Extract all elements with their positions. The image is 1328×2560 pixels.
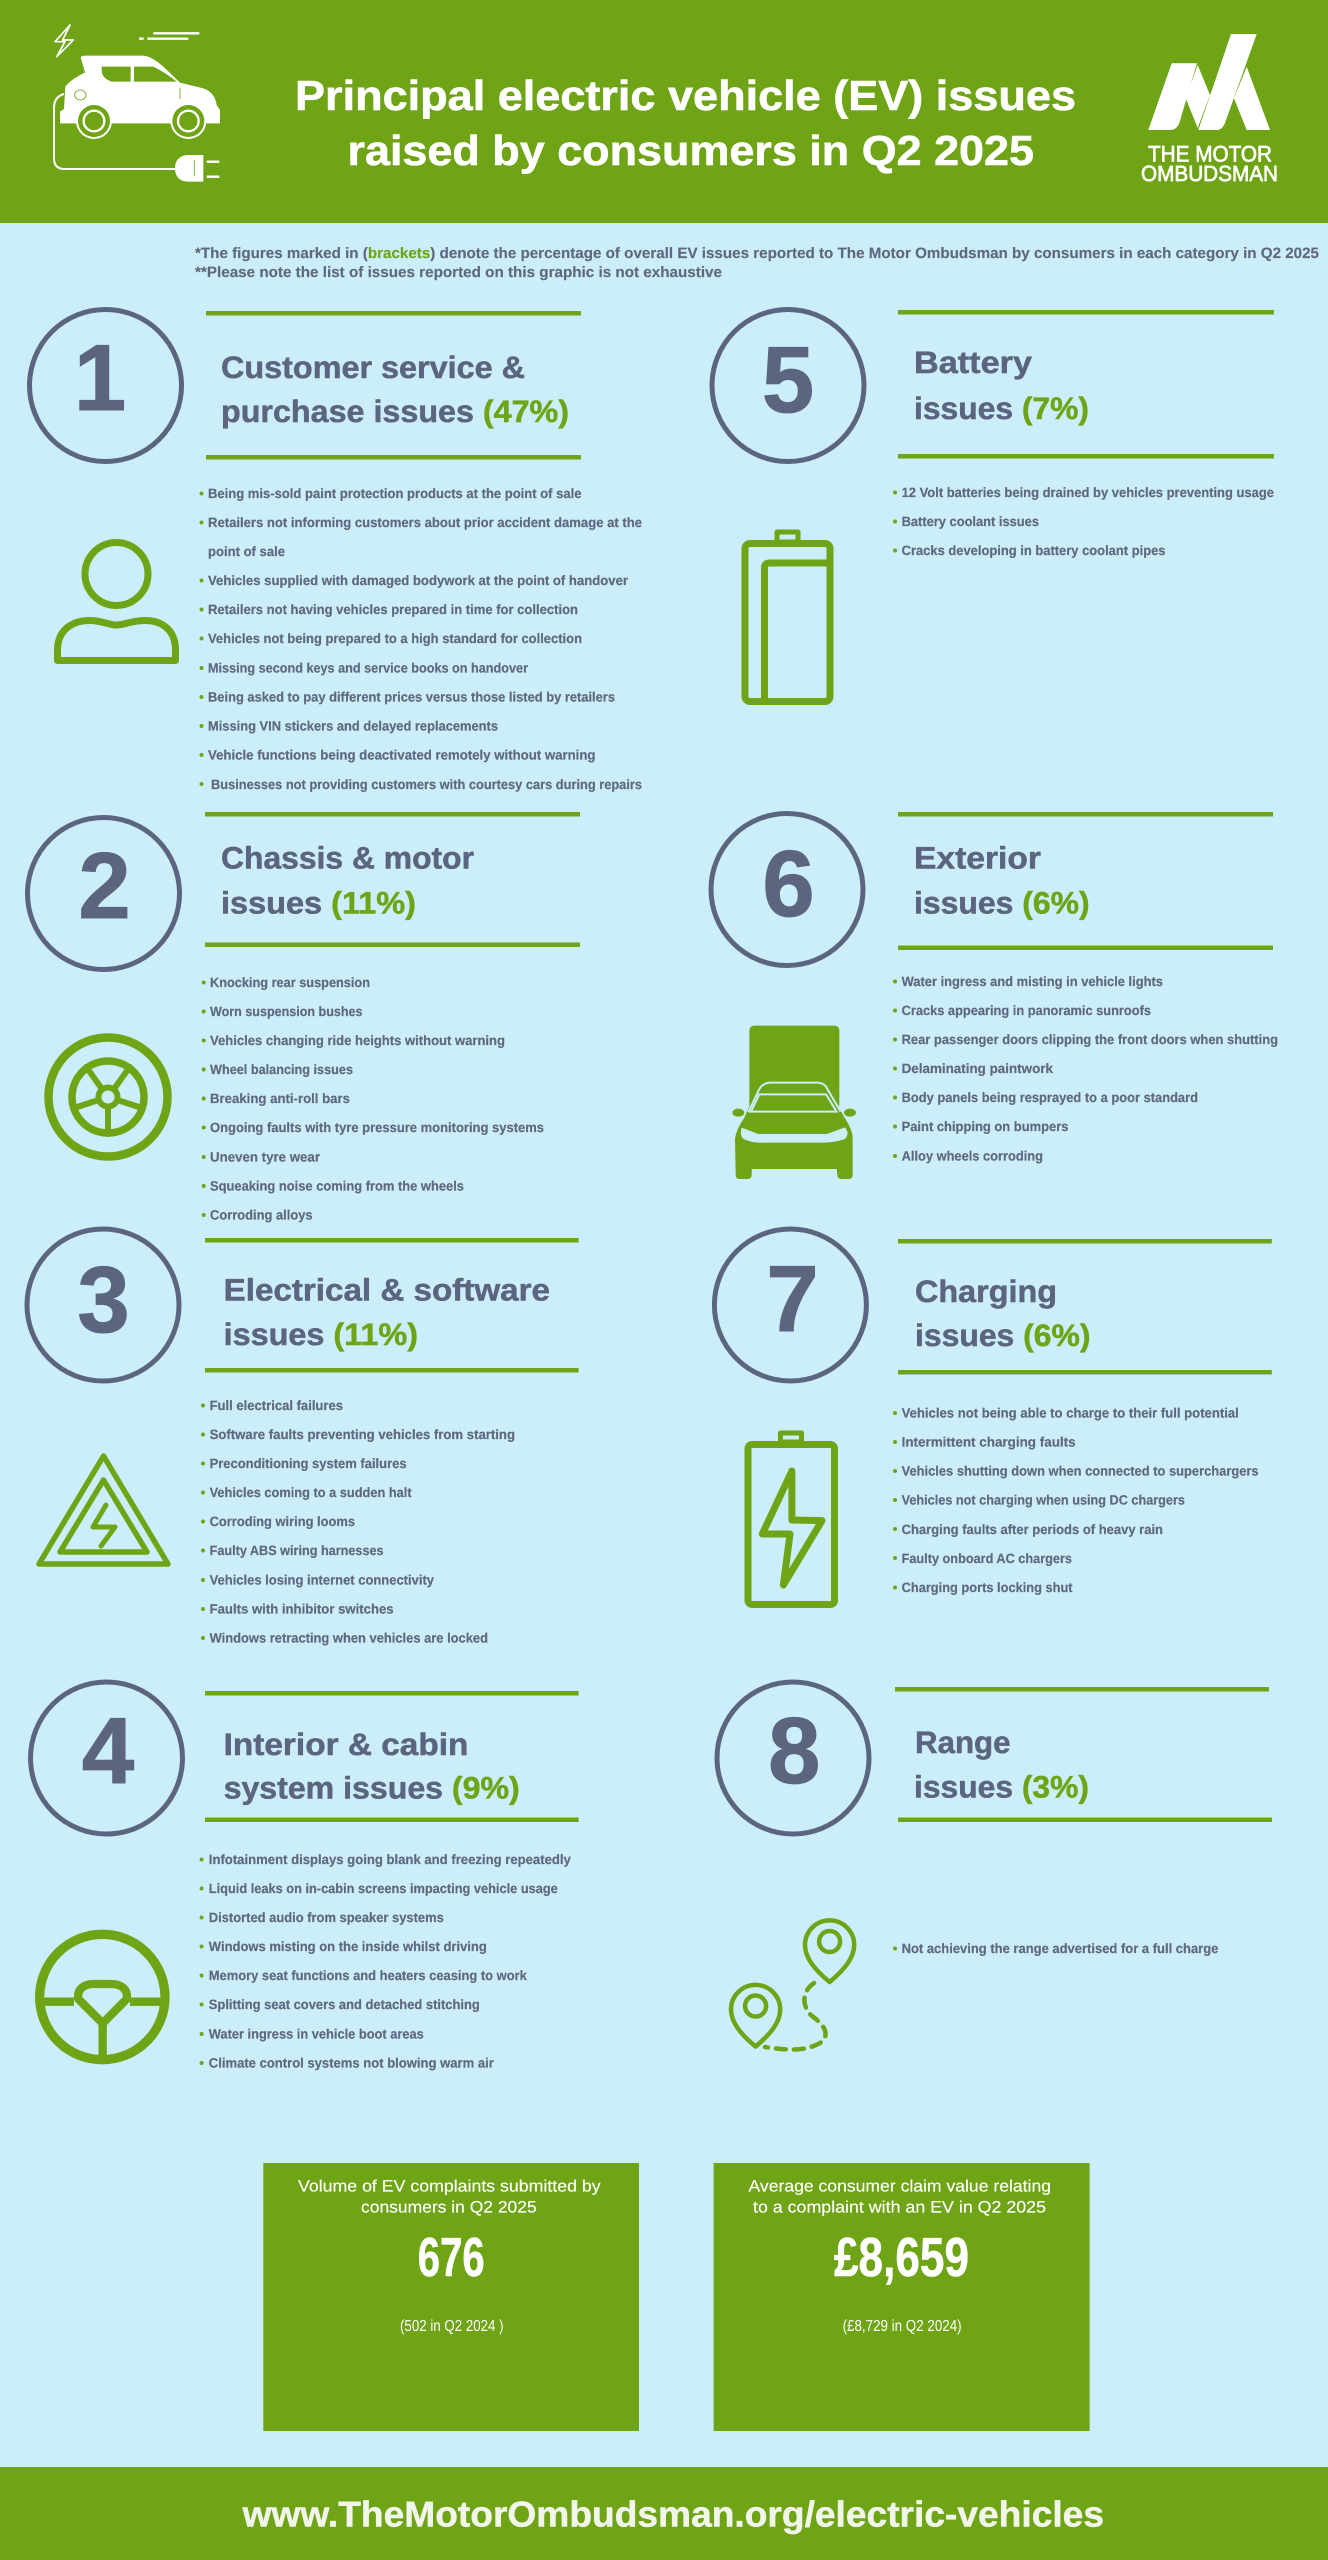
list: charging issues: Vehicles not charging when using DC chargers	[902, 1493, 1185, 1508]
list: chassis and motor issues: Squeaking noise coming from the wheels	[210, 1179, 464, 1194]
panel: 2 chassis and motor issues	[28, 812, 580, 1223]
heading 5: issues (7%)	[914, 391, 1089, 426]
number badge 6: 6	[762, 831, 815, 936]
list: customer service issues: Vehicles supplied with damaged bodywork at the point of handover	[208, 573, 629, 588]
list: customer service issues: Missing second keys and service books on handover	[208, 660, 529, 676]
stat box: volume of EV complaints: (502 in Q2 2024 )	[400, 2318, 504, 2335]
list: chassis and motor issues: Uneven tyre wear	[210, 1150, 321, 1164]
icon: car with open bonnet	[732, 1026, 856, 1179]
logo: The Motor Ombudsman: THE MOTOR	[1148, 142, 1272, 167]
list: exterior issues: Water ingress and misting in vehicle lights	[902, 974, 1163, 989]
list: chassis and motor issues	[202, 975, 544, 1223]
list: chassis and motor issues: Ongoing faults with tyre pressure monitoring systems	[210, 1120, 544, 1135]
heading 3: Electrical & software	[224, 1273, 550, 1308]
heading 7	[898, 1239, 1272, 1374]
number badge 3	[27, 1229, 179, 1381]
logo: The Motor Ombudsman: OMBUDSMAN	[1141, 161, 1278, 186]
list: charging issues: Intermittent charging faults	[902, 1435, 1076, 1450]
icon: charging battery	[748, 1433, 834, 1604]
number badge 1	[30, 310, 182, 462]
list: customer service issues: Vehicles not being prepared to a high standard for collection	[208, 631, 582, 646]
icon: electrical warning triangle	[39, 1456, 168, 1564]
list: customer service issues	[200, 486, 642, 792]
number badge 2: 2	[78, 833, 131, 938]
footnotes: *The figures marked in (brackets) denote the percentage of overall EV issues reported to The Motor Ombudsman by consumers in each category in Q2 2025	[195, 245, 1319, 262]
heading 6: issues (6%)	[914, 886, 1090, 920]
list: charging issues	[893, 1406, 1259, 1595]
list: charging issues: Vehicles not being able to charge to their full potential	[902, 1406, 1239, 1420]
panel: 3 electrical and software issues	[27, 1229, 579, 1646]
heading 2: Chassis & motor	[221, 840, 474, 876]
header band	[0, 0, 1328, 223]
heading 4	[205, 1691, 579, 1822]
list: exterior issues: Body panels being resprayed to a poor standard	[902, 1090, 1198, 1105]
number badge 4: 4	[82, 1698, 134, 1803]
number badge 7	[714, 1229, 866, 1381]
list: interior and cabin issues: Splitting seat covers and detached stitching	[209, 1997, 480, 2012]
logo: The Motor Ombudsman	[1141, 34, 1278, 186]
title: raised by consumers in Q2 2025	[348, 127, 1034, 174]
heading 2	[205, 812, 580, 947]
list: charging issues: Charging faults after periods of heavy rain	[902, 1522, 1163, 1537]
number badge 5: 5	[762, 327, 814, 432]
list: interior and cabin issues	[200, 1852, 571, 2070]
list: electrical and software issues: Vehicles losing internet connectivity	[210, 1572, 434, 1587]
icon: electric car with charging cable	[54, 25, 220, 182]
list: range issues: Not achieving the range advertised for a full charge	[902, 1941, 1219, 1956]
list: electrical and software issues: Software faults preventing vehicles from starting	[210, 1427, 515, 1442]
footnotes: **Please note the list of issues reported on this graphic is not exhaustive	[195, 264, 722, 281]
heading 5	[898, 310, 1274, 458]
panel: 4 interior and cabin system issues	[30, 1682, 579, 2070]
number badge 8: 8	[768, 1698, 820, 1803]
heading 4: system issues (9%)	[224, 1771, 520, 1806]
number badge 4	[30, 1682, 182, 1834]
list: interior and cabin issues: Windows misting on the inside whilst driving	[209, 1939, 487, 1954]
heading 5: Battery	[914, 345, 1033, 380]
heading 4: Interior & cabin	[224, 1727, 468, 1762]
list: customer service issues: Being asked to pay different prices versus those listed by retailers	[208, 690, 615, 704]
heading 7: Charging	[915, 1274, 1057, 1309]
list: electrical and software issues	[201, 1398, 515, 1646]
list: customer service issues: Being mis-sold paint protection products at the point of sale	[208, 486, 582, 501]
list: customer service issues: Businesses not providing customers with courtesy cars during repairs	[211, 777, 642, 792]
heading 8	[895, 1687, 1272, 1822]
list: interior and cabin issues: Distorted audio from speaker systems	[209, 1910, 444, 1925]
panel: 7 charging issues	[714, 1229, 1272, 1604]
stat box: average consumer claim value: to a complaint with an EV in Q2 2025	[753, 2199, 1046, 2217]
list: exterior issues: Paint chipping on bumpers	[902, 1119, 1068, 1134]
panel: 8 range issues	[717, 1682, 1272, 2050]
icon: steering wheel	[40, 1934, 165, 2060]
list: charging issues: Charging ports locking shut	[902, 1580, 1073, 1595]
list: chassis and motor issues: Breaking anti-roll bars	[210, 1091, 350, 1106]
heading 2: issues (11%)	[221, 886, 416, 920]
list: electrical and software issues: Faulty ABS wiring harnesses	[210, 1543, 384, 1558]
icon: route between two map pins	[731, 1920, 854, 2050]
stat box: average consumer claim value: (£8,729 in Q2 2024)	[843, 2318, 962, 2335]
heading 8: Range	[915, 1725, 1010, 1760]
list: chassis and motor issues: Wheel balancing issues	[210, 1062, 353, 1077]
list: electrical and software issues: Corroding wiring looms	[210, 1514, 355, 1529]
heading 6: Exterior	[914, 840, 1041, 876]
number badge 8	[717, 1682, 869, 1834]
heading 8: issues (3%)	[914, 1770, 1089, 1805]
list: customer service issues: Vehicle functions being deactivated remotely without warning	[208, 748, 596, 763]
list: charging issues: Vehicles shutting down when connected to superchargers	[902, 1464, 1259, 1479]
footer band with website address	[0, 2467, 1328, 2560]
list: electrical and software issues: Windows retracting when vehicles are locked	[210, 1631, 488, 1646]
list: chassis and motor issues: Vehicles changing ride heights without warning	[210, 1033, 505, 1048]
number badge 6	[711, 814, 863, 966]
icon: person	[58, 542, 176, 660]
number badge 3: 3	[77, 1247, 130, 1352]
list: exterior issues: Cracks appearing in panoramic sunroofs	[902, 1003, 1151, 1018]
footnotes	[195, 245, 1319, 281]
number badge 1: 1	[74, 325, 126, 430]
stat box: volume of EV complaints: 676	[418, 2226, 485, 2288]
heading 6	[898, 812, 1273, 950]
stat box: average consumer claim value: £8,659	[834, 2226, 969, 2288]
panel: 6 exterior issues	[711, 812, 1278, 1179]
title	[295, 72, 1076, 174]
list: electrical and software issues: Vehicles coming to a sudden halt	[210, 1485, 412, 1500]
list: interior and cabin issues: Water ingress in vehicle boot areas	[209, 2026, 424, 2041]
panel: 5 battery issues	[712, 310, 1274, 702]
list: battery issues: Cracks developing in battery coolant pipes	[902, 543, 1166, 558]
stat box: volume of EV complaints: Volume of EV complaints submitted by	[298, 2178, 601, 2196]
stat box: average consumer claim value: Average consumer claim value relating	[748, 2178, 1051, 2196]
list: battery issues: 12 Volt batteries being drained by vehicles preventing usage	[902, 485, 1274, 500]
list: electrical and software issues: Preconditioning system failures	[210, 1456, 407, 1471]
panel: 1 customer service and purchase issues	[30, 310, 642, 792]
heading 1: purchase issues (47%)	[221, 394, 569, 429]
list: exterior issues: Rear passenger doors clipping the front doors when shutting	[902, 1032, 1278, 1047]
title: Principal electric vehicle (EV) issues	[295, 72, 1076, 119]
stat box: average consumer claim value	[714, 2163, 1090, 2431]
list: customer service issues: Retailers not having vehicles prepared in time for collection	[208, 602, 578, 617]
footer band with website address: www.TheMotorOmbudsman.org/electric-vehicles	[242, 2494, 1104, 2535]
list: electrical and software issues: Faults with inhibitor switches	[210, 1602, 394, 1616]
stat box: volume of EV complaints: consumers in Q2 2025	[361, 2199, 537, 2217]
list: chassis and motor issues: Knocking rear suspension	[210, 975, 370, 990]
list: chassis and motor issues: Worn suspension bushes	[210, 1004, 362, 1019]
list: customer service issues: Retailers not informing customers about prior accident damage at the	[208, 515, 642, 530]
number badge 5	[712, 310, 864, 462]
list: electrical and software issues: Full electrical failures	[210, 1398, 343, 1413]
stat box: volume of EV complaints	[263, 2163, 639, 2431]
list: customer service issues: Missing VIN stickers and delayed replacements	[208, 719, 498, 734]
list: exterior issues: Delaminating paintwork	[902, 1061, 1053, 1076]
list: battery issues: Battery coolant issues	[902, 514, 1039, 529]
heading 3	[205, 1238, 579, 1372]
list: interior and cabin issues: Memory seat functions and heaters ceasing to work	[209, 1968, 527, 1983]
list: chassis and motor issues: Corroding alloys	[210, 1208, 313, 1223]
number badge 2	[28, 818, 180, 970]
list: exterior issues: Alloy wheels corroding	[902, 1148, 1043, 1164]
heading 7: issues (6%)	[915, 1318, 1090, 1353]
heading 1: Customer service &	[221, 350, 525, 385]
list: exterior issues	[893, 974, 1278, 1164]
icon: battery	[745, 532, 830, 702]
list: interior and cabin issues: Infotainment displays going blank and freezing repeatedly	[209, 1852, 571, 1867]
list: interior and cabin issues: Liquid leaks on in-cabin screens impacting vehicle usage	[209, 1881, 558, 1896]
list: customer service issues: point of sale	[208, 544, 285, 559]
number badge 7: 7	[766, 1246, 819, 1351]
list: interior and cabin issues: Climate control systems not blowing warm air	[209, 2056, 495, 2070]
icon: wheel	[48, 1038, 168, 1156]
list: charging issues: Faulty onboard AC chargers	[902, 1551, 1072, 1566]
list: battery issues	[893, 485, 1274, 558]
heading 3: issues (11%)	[224, 1317, 418, 1352]
heading 1	[206, 311, 581, 460]
